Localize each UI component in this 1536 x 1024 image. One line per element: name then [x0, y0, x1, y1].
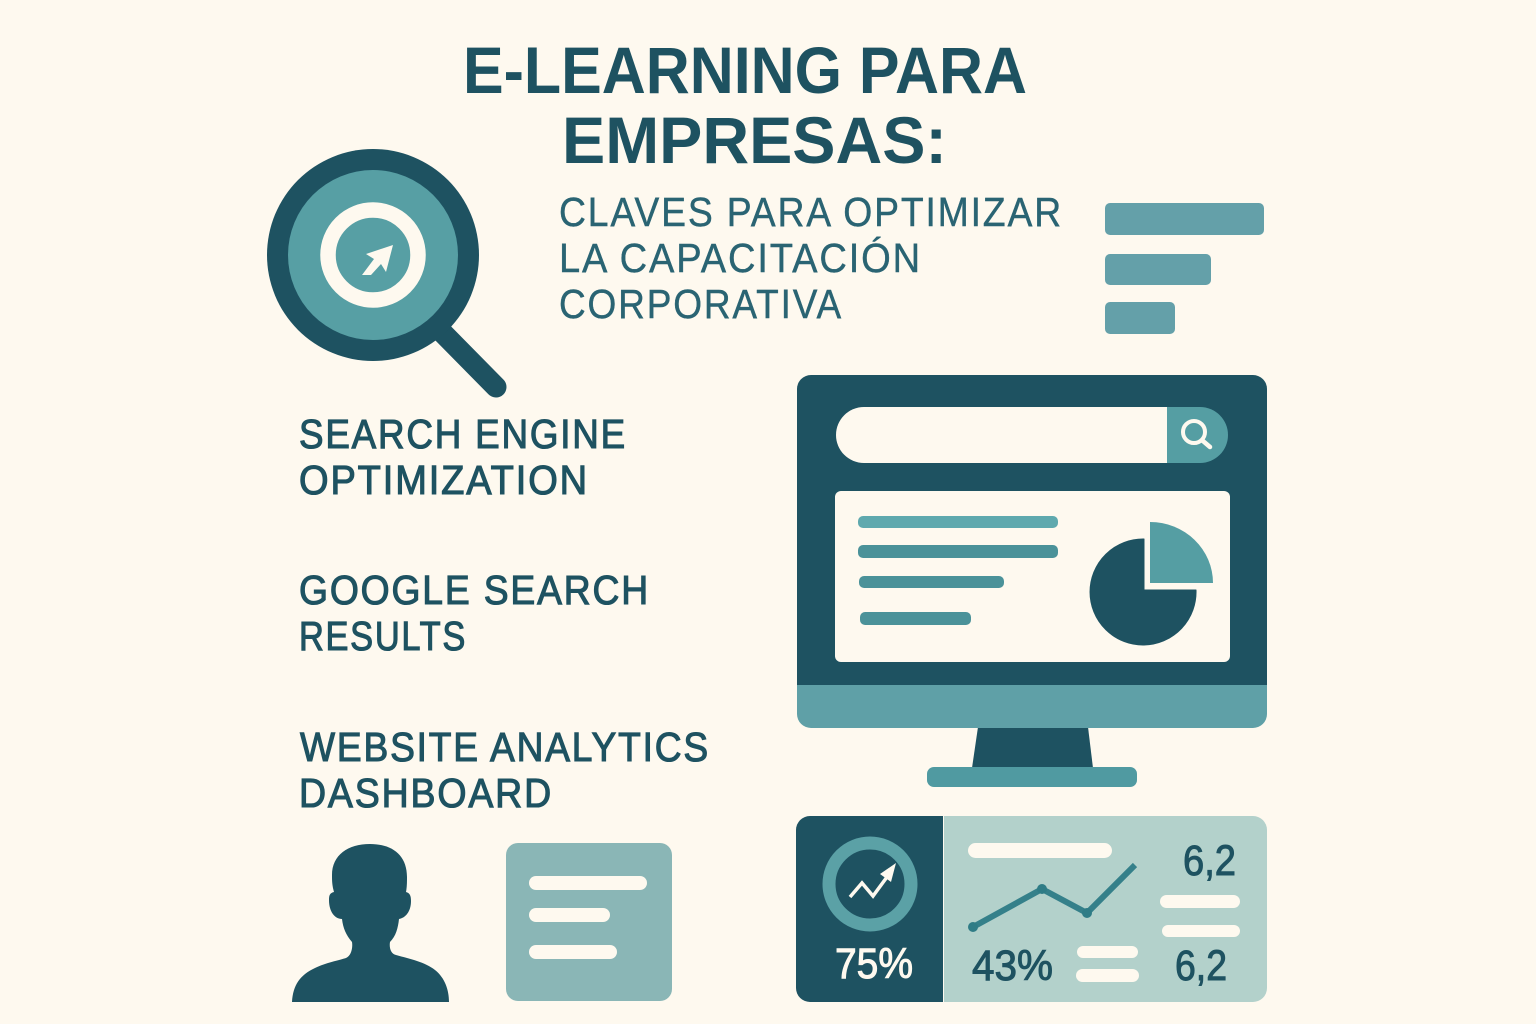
monitor base	[927, 767, 1137, 787]
icon: person silhouette	[292, 844, 449, 1002]
label: website analytics dashboard: WEBSITE ANALYTICS	[300, 724, 710, 770]
content panel	[835, 491, 1230, 662]
metrics: 43%	[972, 942, 1053, 990]
icon: desktop monitor	[797, 375, 1267, 787]
icon: horizontal bars	[1105, 203, 1264, 334]
label: search engine optimization	[299, 411, 627, 503]
monitor stand	[972, 727, 1093, 768]
label: website analytics dashboard	[299, 724, 710, 816]
subtitle: CLAVES PARA OPTIMIZAR	[559, 189, 1063, 235]
metrics: 6,2	[1175, 942, 1227, 990]
label: google search results: RESULTS	[299, 613, 467, 659]
title: E-LEARNING PARA	[463, 33, 1027, 107]
label: website analytics dashboard: DASHBOARD	[299, 770, 553, 816]
monitor chin	[797, 680, 1267, 728]
subtitle	[559, 189, 1063, 327]
label: search engine optimization: SEARCH ENGINE	[299, 411, 627, 457]
title	[463, 33, 1027, 177]
panel: analytics dashboard	[796, 816, 1267, 1002]
label: google search results	[299, 567, 650, 659]
line chart	[968, 865, 1135, 932]
subtitle: LA CAPACITACIÓN	[559, 235, 922, 281]
dashboard dark section: 75%	[835, 940, 913, 988]
metrics: 6,2	[1183, 837, 1236, 885]
search bar	[836, 407, 1228, 463]
dashboard light section	[944, 816, 1267, 1002]
label: search engine optimization: OPTIMIZATION	[299, 457, 589, 503]
monitor screen	[797, 375, 1267, 685]
subtitle: CORPORATIVA	[559, 281, 843, 327]
pie chart	[1090, 522, 1213, 645]
icon: magnifying glass with target and arrow	[267, 149, 496, 387]
placeholder pills	[968, 843, 1240, 982]
dashboard dark section	[796, 816, 943, 1002]
title: EMPRESAS:	[562, 103, 947, 177]
icon: text card	[506, 843, 672, 1001]
label: google search results: GOOGLE SEARCH	[299, 567, 650, 613]
metrics	[972, 837, 1236, 990]
